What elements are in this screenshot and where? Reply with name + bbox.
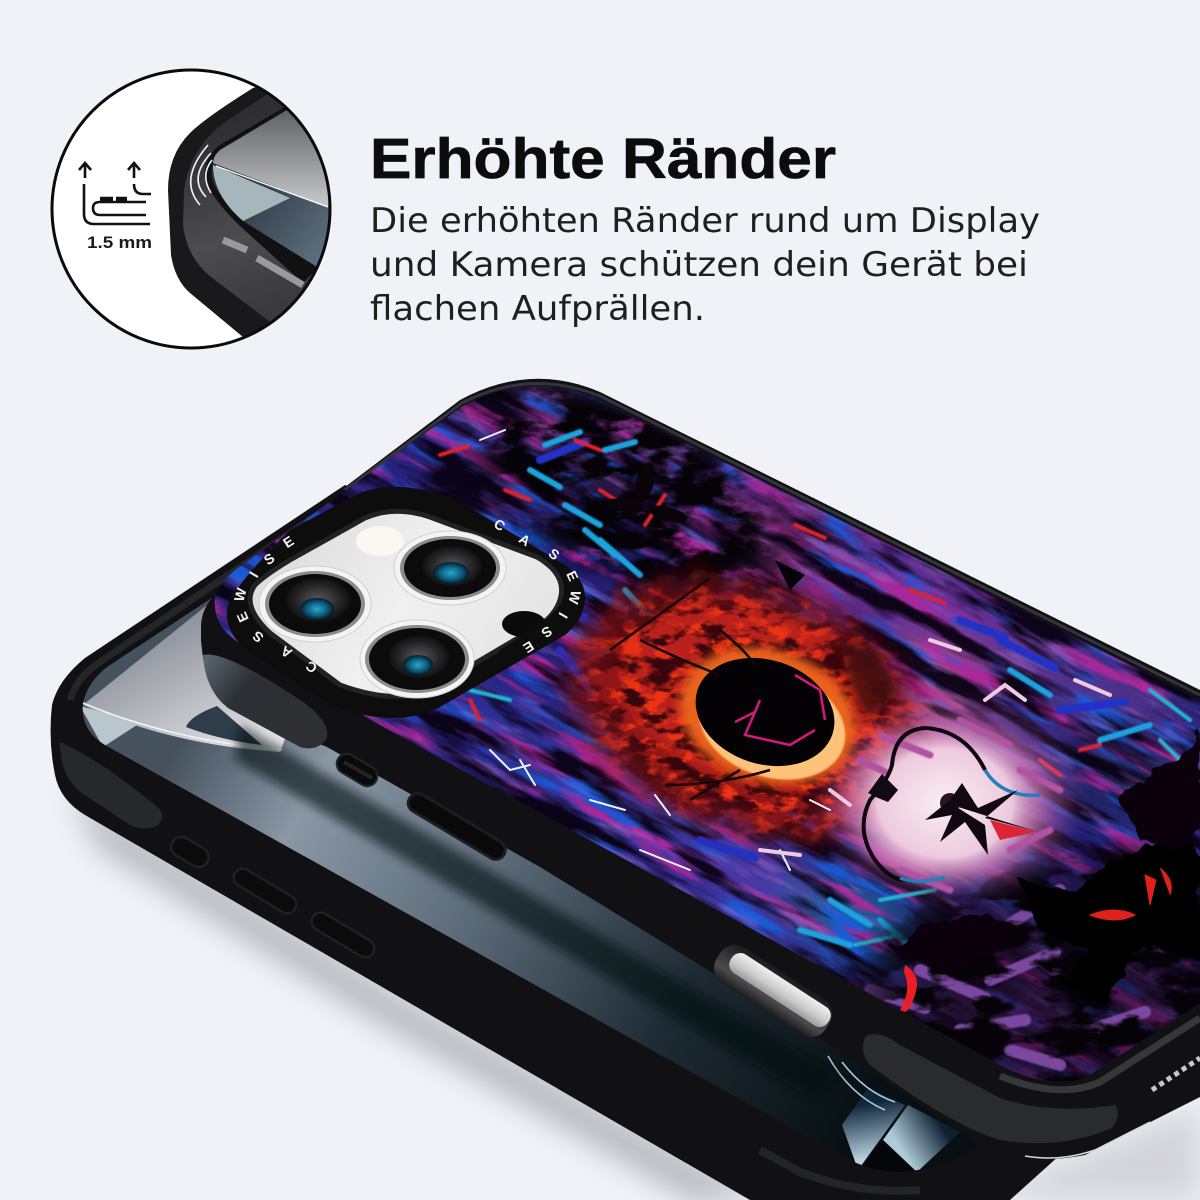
back phone case xyxy=(51,485,1060,1200)
orb cracks xyxy=(735,675,825,745)
lens 3 xyxy=(360,620,474,698)
serpent head xyxy=(868,774,898,802)
right rim highlight xyxy=(1000,1018,1200,1090)
black butterfly xyxy=(604,462,688,522)
drop shadows under cases xyxy=(68,790,1200,1200)
bottom blue fans xyxy=(842,1088,905,1170)
brand text: CASEWISE: S xyxy=(249,628,267,646)
microphone hole xyxy=(502,611,546,637)
white dashes xyxy=(480,430,830,870)
brand text: CASEWISE: E xyxy=(280,533,297,551)
brand text: CASEWISE: S xyxy=(538,623,555,641)
fire nebula xyxy=(552,556,934,857)
brand text: CASEWISE: S xyxy=(261,550,278,568)
black edge around screen xyxy=(205,104,335,283)
camera module xyxy=(227,487,585,718)
label: 1.5 mm: 1.5 mm xyxy=(87,233,152,252)
moon streaks xyxy=(860,720,1060,890)
red splash xyxy=(900,965,917,1012)
camera-side translucent pad xyxy=(203,655,327,748)
case frame xyxy=(51,485,1060,1200)
top dark mass xyxy=(446,386,804,600)
port: silver action button xyxy=(707,938,839,1044)
strokes xyxy=(440,432,1195,950)
grey reflection xyxy=(213,110,335,207)
brand text: CASEWISE: E xyxy=(563,568,582,584)
highlight streak xyxy=(223,240,303,285)
front phone case xyxy=(201,379,1200,1159)
white disc xyxy=(52,70,330,348)
brand text: CASEWISE: W xyxy=(565,589,584,607)
pale glass wedge xyxy=(213,165,290,221)
fire texture xyxy=(565,570,931,846)
monster eyes xyxy=(1090,868,1171,920)
phone screen xyxy=(82,598,976,1172)
lens window xyxy=(250,511,562,696)
ring cover over hole xyxy=(490,582,583,665)
upper reflection xyxy=(83,605,285,752)
heading: Erhöhte Ränder xyxy=(370,127,836,191)
description text xyxy=(370,201,1040,329)
inner lighter rim xyxy=(70,506,330,700)
circle outline xyxy=(52,70,330,348)
brand text: CASEWISE: E xyxy=(520,638,537,657)
dark lower ground xyxy=(888,730,1200,1000)
brand text: CASEWISE: A xyxy=(278,643,295,662)
black orb xyxy=(696,658,834,766)
description text: flachen Aufprällen. xyxy=(370,289,705,329)
brand text: CASEWISE: A xyxy=(516,530,533,549)
lens 2 xyxy=(394,531,506,605)
brand text: CASEWISE: I xyxy=(246,569,262,580)
dark fire mass xyxy=(840,640,900,720)
impact arcs xyxy=(191,145,212,205)
pale chips xyxy=(760,640,1110,855)
moon xyxy=(837,715,1053,891)
shadow of front case on screen xyxy=(235,725,840,1100)
case body xyxy=(201,379,1200,1159)
white edge line xyxy=(216,166,328,207)
description text: und Kamera schützen dein Gerät bei xyxy=(370,245,1028,285)
height diagram xyxy=(79,163,151,224)
glow rim xyxy=(698,693,846,780)
brand text: CASEWISE: C xyxy=(303,658,320,677)
brand text: CASEWISE: S xyxy=(545,545,563,563)
black kite xyxy=(775,560,805,590)
brand text: CASEWISE xyxy=(231,515,584,677)
side buttons xyxy=(168,833,378,961)
brand text: CASEWISE: I xyxy=(555,610,571,621)
switch cutout xyxy=(333,750,381,790)
screen xyxy=(212,110,335,267)
colour fields xyxy=(404,339,1200,1070)
circular detail callout xyxy=(52,70,340,348)
streak textures xyxy=(214,386,1200,1082)
translucent inner band xyxy=(183,90,330,322)
lens 1 xyxy=(259,566,371,642)
bottom rim highlight xyxy=(760,1150,920,1191)
dark bumper xyxy=(168,70,340,337)
case artwork xyxy=(214,386,1200,1082)
lilac shards xyxy=(870,890,1195,1065)
power button xyxy=(405,790,509,863)
moon haze xyxy=(835,715,1065,885)
black ring xyxy=(227,487,585,718)
description text: Die erhöhten Ränder rund um Display xyxy=(370,201,1040,241)
lower dark mass xyxy=(850,836,1200,1082)
bottom edge highlight xyxy=(1025,1122,1150,1158)
translucent bumper pad xyxy=(60,742,162,828)
brand text: CASEWISE: W xyxy=(231,585,250,603)
lower dark wash xyxy=(854,839,1200,1082)
brand text: CASEWISE: C xyxy=(491,515,508,534)
dark reflection blob xyxy=(186,706,262,745)
serpent xyxy=(864,728,985,880)
light wedge xyxy=(82,706,179,746)
serpent tail xyxy=(900,770,1040,881)
case corner close-up xyxy=(168,70,340,337)
speaker holes xyxy=(1152,1058,1200,1090)
lower-right translucent pad xyxy=(863,1034,1118,1143)
winged figure xyxy=(925,783,1038,855)
white curve line xyxy=(83,703,282,750)
flash xyxy=(356,526,404,556)
brand text: CASEWISE: E xyxy=(233,609,252,625)
dark branches xyxy=(610,578,770,800)
upper rim xyxy=(345,384,1200,695)
orange glow xyxy=(673,640,862,792)
